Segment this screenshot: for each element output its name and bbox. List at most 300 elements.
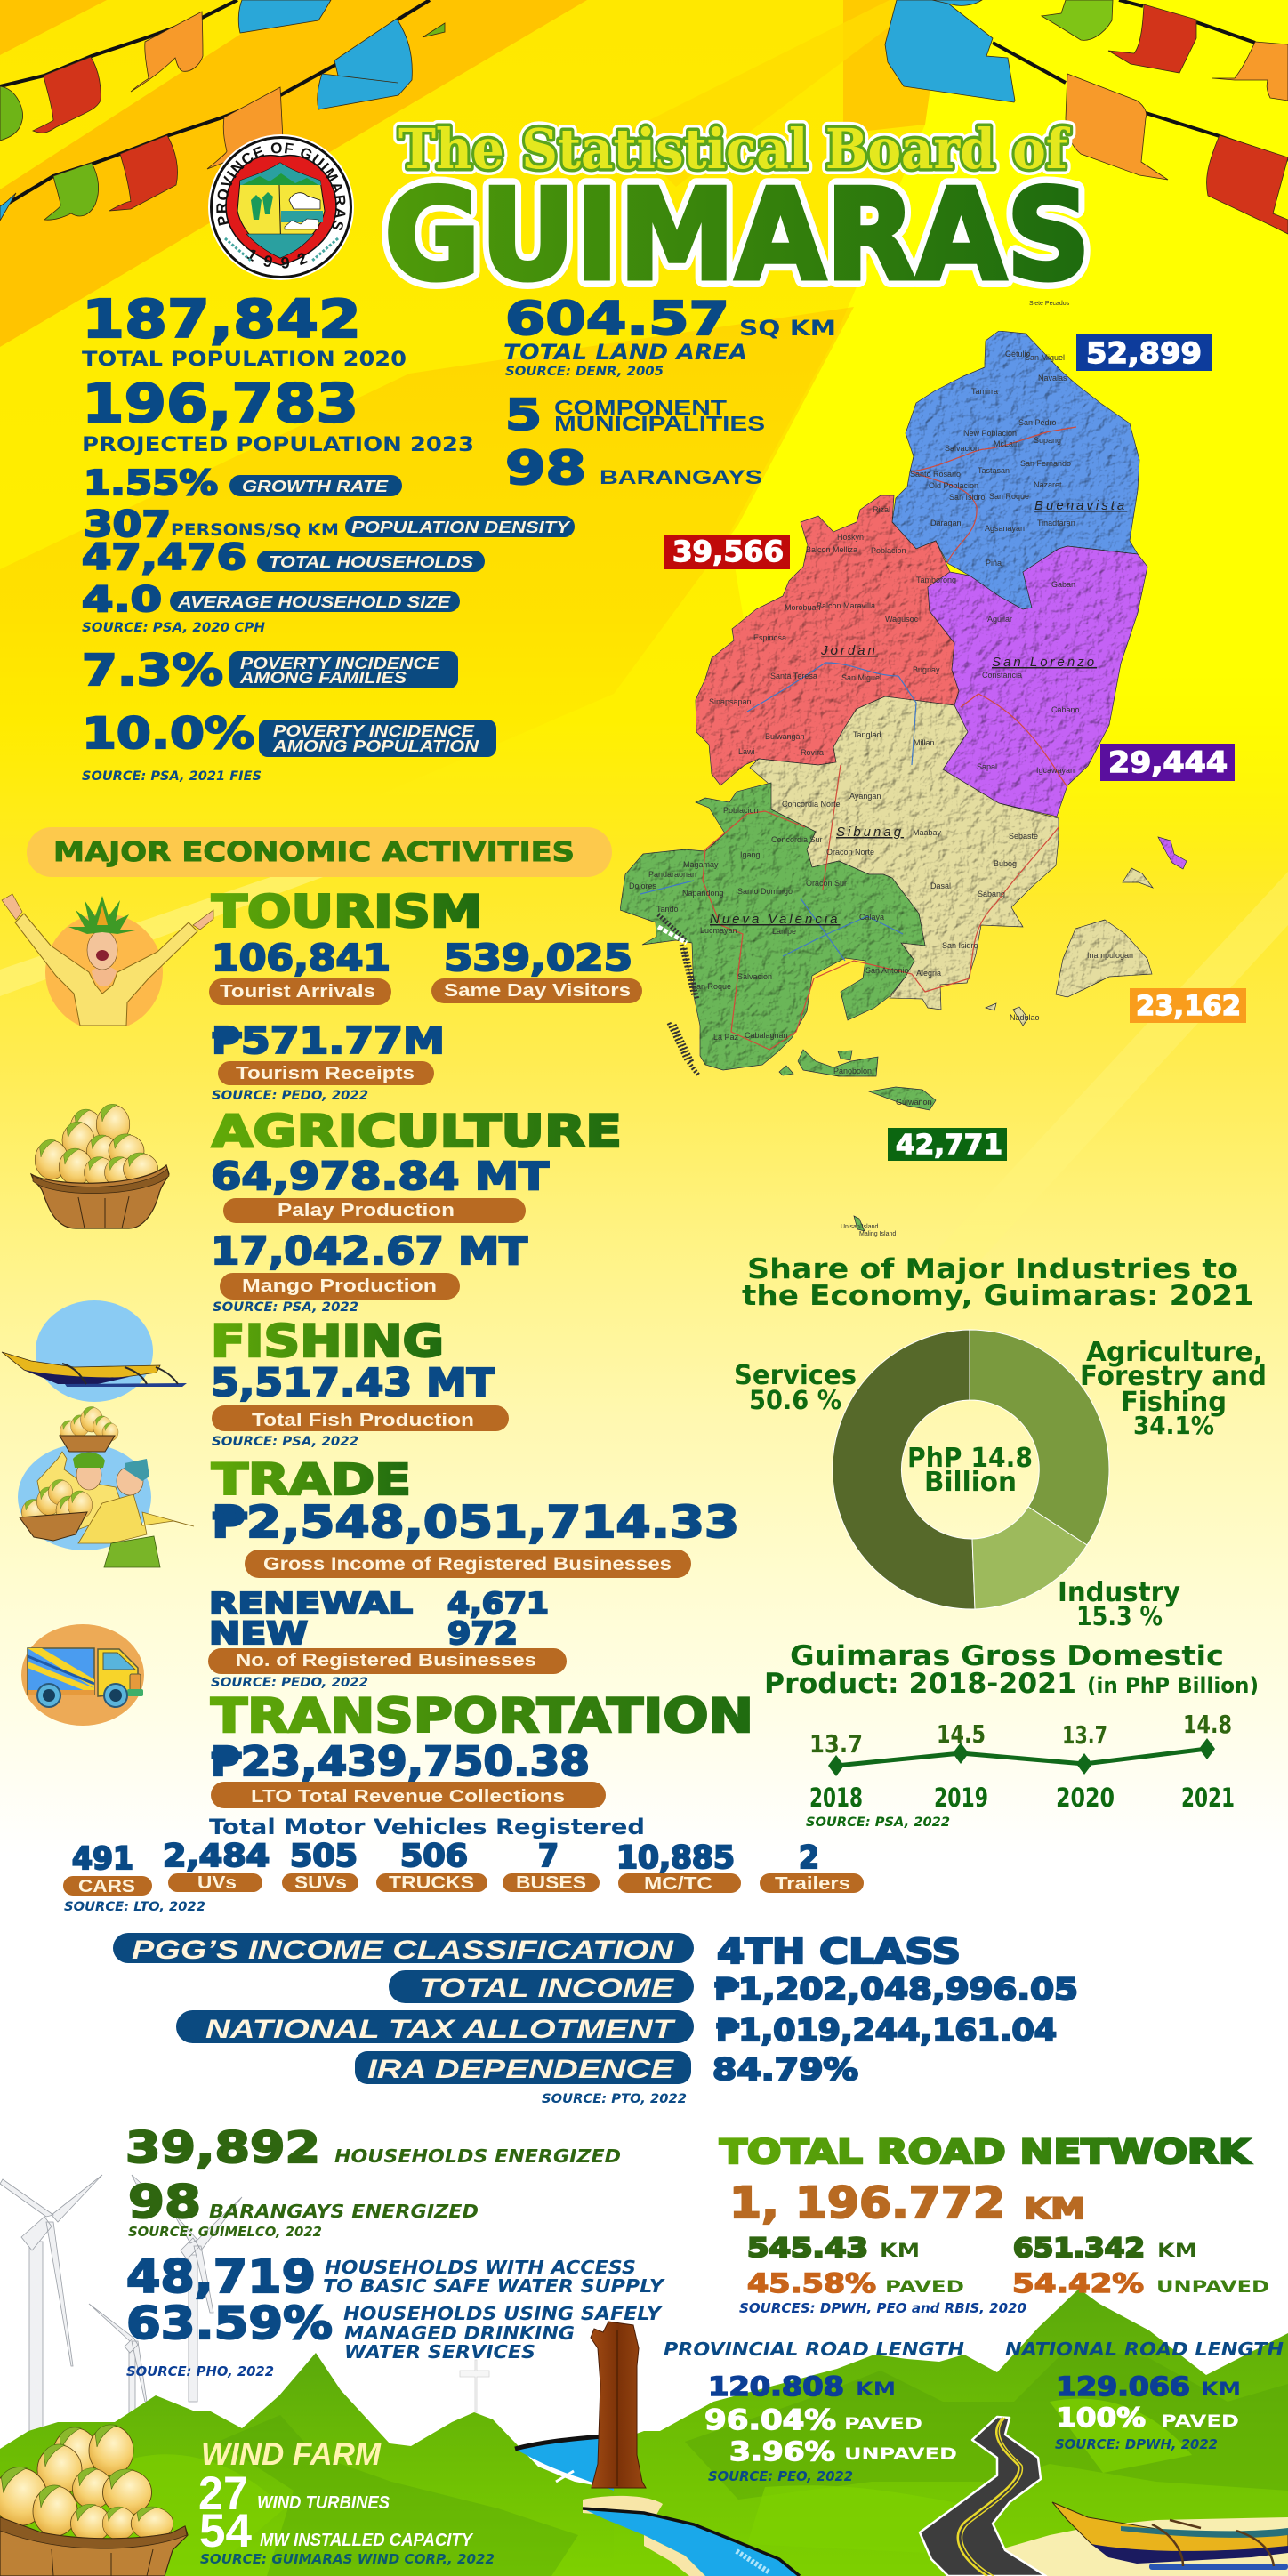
stat: unpaved road: KM — [1157, 2240, 1197, 2261]
stat: palay production — [211, 1155, 550, 1223]
stat: poverty incidence among population: 10.0% — [82, 709, 254, 759]
map barangay names: Lanipe — [772, 927, 796, 936]
donut chart: share of industries — [734, 1330, 1267, 1631]
map barangay names: Lucmayan — [700, 926, 737, 935]
bunting flags top right — [885, 0, 1288, 234]
map label: Sibunag population: 23,162 — [1136, 991, 1241, 1022]
stat: households using safely managed drinking water: WATER SERVICES — [344, 2341, 535, 2363]
stat: population density: 307 — [84, 504, 171, 545]
map barangay names: Espinosa — [753, 633, 786, 642]
stat: national paved — [1056, 2403, 1239, 2433]
map barangay names: Concordia Sur — [771, 835, 823, 844]
stat: wind turbines — [198, 2467, 390, 2520]
icon: Balaan Bukid tower — [591, 2322, 646, 2488]
line chart: gross domestic product — [764, 1640, 1259, 1830]
stat: unpaved road — [1012, 2233, 1269, 2298]
stat: provincial road km: KM — [856, 2379, 896, 2400]
stat: households with access to basic safe water — [126, 2251, 666, 2304]
stat: barangays energized: 98 — [128, 2177, 201, 2229]
map regions — [620, 331, 1187, 1231]
source: PSA 2020 CPH: SOURCE: PSA, 2020 CPH — [82, 621, 265, 635]
stat: paved road — [747, 2233, 964, 2298]
heading: trade: TRADE — [212, 1455, 411, 1505]
stat: tourism receipts: Tourism Receipts — [236, 1064, 415, 1083]
title line: The Statistical Board of: The Statistical Board of — [398, 117, 1070, 181]
chart title: GDP — [764, 1640, 1259, 1700]
stat: same day visitors: Same Day Visitors — [444, 981, 631, 1001]
vehicle count: buses: BUSES — [516, 1873, 586, 1893]
map barangay names: Sabang — [978, 890, 1005, 898]
map barangay names: Rizal — [873, 505, 890, 514]
stat: total land area: 604.57 — [505, 293, 729, 346]
map barangay names: Concordia Norte — [782, 800, 841, 809]
row: national tax allotment: NATIONAL TAX ALLOTMENT — [205, 2015, 676, 2044]
vehicle count: MC/TC: MC/TC — [644, 1874, 712, 1894]
heading: transportation: TRANSPORTATION — [211, 1689, 753, 1743]
stat: component municipalities: MUNICIPALITIES — [554, 412, 765, 435]
stat: total land area: SQ KM — [739, 316, 836, 341]
map barangay names — [629, 301, 1133, 1237]
vehicle count: trucks — [376, 1839, 487, 1893]
map barangay names: Daragan — [930, 519, 962, 527]
stat: LTO total revenue collections: LTO Total Revenue Collections — [251, 1787, 565, 1807]
stat: total fish production: Total Fish Production — [252, 1411, 474, 1430]
icon: wind turbines — [0, 2175, 489, 2437]
map barangay names: Bulwangan — [765, 732, 805, 741]
GDP years: 2018 — [809, 1783, 863, 1813]
stat: total road length: KM — [1024, 2192, 1085, 2226]
stat: national paved: 100% — [1056, 2403, 1146, 2433]
map barangay names: Bugnay — [913, 665, 940, 674]
map municipality names: San Lorenzo — [992, 655, 1097, 670]
map municipality names — [710, 498, 1127, 927]
map barangay names: Lawi — [738, 747, 755, 756]
panel: transportation — [63, 1689, 864, 1914]
source: PSA 2022: SOURCE: PSA, 2022 — [213, 1300, 358, 1315]
vehicle count: UVs — [163, 1839, 270, 1893]
stat: households using safely managed drinking water: MANAGED DRINKING — [344, 2322, 575, 2344]
stat: mango production — [211, 1229, 528, 1300]
map barangay names: Old Poblacion — [929, 481, 978, 490]
map barangay names: Ayangan — [849, 792, 881, 801]
stat: tourism receipts: ₱571.77M — [212, 1019, 445, 1062]
vehicle count: trailers: Trailers — [775, 1874, 850, 1894]
row: total income: TOTAL INCOME — [419, 1974, 674, 2003]
heading: tourism: TOURISM — [212, 886, 482, 938]
stat: total population 2020: 187,842 — [82, 288, 361, 350]
map barangay names: Unisan Island — [841, 1224, 879, 1230]
vehicle count: cars — [63, 1841, 152, 1896]
map barangay names: Inampulogan — [1087, 951, 1133, 960]
map label: Nueva Valencia population: 42,771 — [896, 1130, 1002, 1161]
map barangay names: San Antonio — [865, 966, 909, 975]
stat: gross income of registered businesses: ₱2,548,051,714.33 — [212, 1497, 739, 1548]
map barangay names: New Poblacion — [963, 429, 1017, 438]
map barangay names: Supang — [1034, 436, 1061, 445]
stat: national paved: PAVED — [1161, 2411, 1239, 2431]
row: IRA dependence — [355, 2051, 858, 2088]
map label: San Lorenzo population: 29,444 — [1108, 745, 1228, 779]
label: agriculture, forestry and fishing: 34.1% — [1133, 1411, 1214, 1440]
stat: total households: TOTAL HOUSEHOLDS — [269, 553, 473, 571]
vehicle count: trucks: 506 — [400, 1839, 468, 1874]
seal: Province of Guimaras — [208, 134, 354, 280]
heading: provincial road length: PROVINCIAL ROAD LENGTH — [664, 2339, 964, 2360]
title line: GUIMARAS: GUIMARAS — [384, 163, 1091, 309]
map islets, rivers and roads — [640, 427, 1076, 1076]
stat: installed capacity: MW INSTALLED CAPACITY — [260, 2531, 474, 2550]
stat: projected population 2023: PROJECTED POPULATION 2023 — [82, 434, 474, 456]
map barangay names: Tando — [656, 905, 679, 914]
source: PEDO 2022: SOURCE: PEDO, 2022 — [211, 1676, 368, 1690]
stat: average household size — [82, 580, 460, 620]
scenery: river and sand — [515, 2435, 1288, 2576]
map of Guimaras — [620, 301, 1246, 1237]
map barangay names: Cabalagnan — [745, 1031, 788, 1040]
stat: provincial paved: 96.04% — [704, 2404, 836, 2436]
stat: installed capacity — [199, 2505, 474, 2557]
icon: winding road — [920, 2417, 1046, 2576]
stat: unpaved road: 651.342 — [1013, 2233, 1145, 2263]
map barangay names: Bubog — [994, 859, 1017, 868]
vehicle count: trailers: 2 — [799, 1840, 819, 1876]
source: PSA 2022: SOURCE: PSA, 2022 — [212, 1435, 358, 1449]
stat: unpaved road: UNPAVED — [1156, 2277, 1269, 2297]
scenery: green hills — [0, 2289, 1288, 2576]
map barangay names: Salvacion — [945, 444, 979, 453]
row: national tax allotment — [176, 2010, 1057, 2049]
stat: gross income of registered businesses: Gross Income of Registered Businesses — [263, 1554, 672, 1574]
label: industry: Industry — [1058, 1577, 1180, 1608]
map barangay names: Salvacion — [737, 972, 772, 981]
map barangay names: Wagusoc — [885, 615, 919, 624]
panel: provincial road length — [664, 2339, 964, 2484]
stat: total road length: 1, 196.772 — [729, 2178, 1005, 2228]
stat: LTO total revenue collections: ₱23,439,750.38 — [211, 1738, 590, 1785]
map barangay names: Tamirra — [971, 387, 998, 396]
stat: paved road: PAVED — [885, 2277, 964, 2297]
map municipality names: Nueva Valencia — [710, 912, 841, 927]
donut centre total: PhP 14.8 — [907, 1443, 1033, 1474]
stat: tourist arrivals: 106,841 — [212, 937, 390, 979]
stat: registered businesses renewal and new — [208, 1586, 567, 1674]
source: LTO 2022: SOURCE: LTO, 2022 — [64, 1900, 205, 1914]
map barangay names: Igcawayan — [1036, 766, 1075, 775]
vehicle count: cars: CARS — [78, 1877, 135, 1896]
stat: total land area — [503, 293, 836, 379]
stat: component municipalities: COMPONENT — [554, 396, 727, 419]
GDP values — [809, 1710, 1232, 1759]
stat: provincial paved — [704, 2404, 922, 2436]
panel: major economic activities header — [27, 827, 612, 877]
vehicle count: buses — [503, 1839, 600, 1893]
bunting flags top left — [0, 0, 445, 221]
title line: GUIMARAS: GUIMARAS — [384, 163, 1091, 309]
stat: tourist arrivals: Tourist Arrivals — [220, 982, 375, 1002]
source: PTO 2022: SOURCE: PTO, 2022 — [542, 2092, 687, 2106]
map barangay names: Agsanayan — [985, 524, 1025, 533]
map barangay names: San Pedro — [1018, 418, 1057, 427]
row: national tax allotment: ₱1,019,244,161.04 — [716, 2013, 1057, 2049]
label: agriculture, forestry and fishing: Fishing — [1121, 1387, 1227, 1418]
vehicle count: UVs: 2,484 — [163, 1839, 270, 1874]
map barangay names: Oracon Norte — [826, 848, 874, 857]
icon: outrigger boat on beach — [1052, 2502, 1288, 2570]
stat: gross income of registered businesses — [212, 1497, 739, 1578]
stat: unpaved road: 54.42% — [1012, 2268, 1144, 2298]
panel: population statistics — [82, 288, 575, 784]
row: total income: ₱1,202,048,996.05 — [714, 1972, 1078, 2008]
stat: growth rate: 1.55% — [84, 463, 218, 503]
GDP line and markers — [828, 1738, 1215, 1776]
seal: Province of Guimaras: PROVINCE OF GUIMARAS — [216, 142, 345, 230]
stat: barangays — [505, 442, 762, 495]
stat: provincial road km — [708, 2371, 896, 2402]
stat: provincial unpaved — [729, 2436, 957, 2467]
map label: Buenavista population: 52,899 — [1086, 336, 1202, 370]
map barangay names: Magamay — [683, 860, 719, 869]
stat: total fish production: 5,517.43 MT — [211, 1361, 495, 1405]
stat: households energized: 39,892 — [125, 2123, 320, 2173]
donut centre total — [907, 1443, 1033, 1498]
map barangay names: Igang — [740, 850, 761, 859]
panel: fishing — [211, 1316, 509, 1449]
GDP values: 14.8 — [1183, 1710, 1232, 1739]
map barangay names: Siete Pecados — [1029, 301, 1070, 307]
panel: provincial government income — [113, 1932, 1078, 2106]
GDP values: 14.5 — [937, 1719, 986, 1749]
stat: palay production: 64,978.84 MT — [211, 1155, 550, 1199]
map barangay names: Aguilar — [987, 615, 1012, 624]
stat: growth rate — [84, 463, 402, 503]
stat: households using safely managed drinking water — [126, 2298, 664, 2363]
source: PEDO 2022: SOURCE: PEDO, 2022 — [212, 1089, 368, 1103]
stat: provincial road km: 120.808 — [708, 2371, 844, 2402]
stat: households using safely managed drinking water: HOUSEHOLDS USING SAFELY — [343, 2303, 664, 2324]
panel: utilities statistics — [125, 2123, 666, 2379]
row: total income — [389, 1970, 1078, 2008]
heading: total road network: TOTAL ROAD NETWORK — [720, 2133, 1252, 2171]
stat: paved road: 545.43 — [747, 2233, 868, 2263]
stat: provincial paved: PAVED — [844, 2414, 922, 2434]
stat: households energized — [125, 2123, 621, 2173]
map barangay names: San Fernando — [1020, 459, 1071, 468]
slice: services — [833, 1330, 975, 1609]
stat: population density: PERSONS/SQ KM — [171, 520, 339, 540]
source: GUIMELCO 2022: SOURCE: GUIMELCO, 2022 — [128, 2224, 322, 2240]
map barangay names: San Miguel — [841, 673, 881, 682]
stat: registered businesses renewal and new: 972 — [447, 1616, 518, 1652]
stat: national road km — [1056, 2371, 1241, 2402]
vehicle count: trucks: TRUCKS — [389, 1873, 474, 1893]
heading: fishing: FISHING — [211, 1316, 444, 1367]
stat: same day visitors — [431, 937, 642, 1003]
map barangay names: Sinapsapan — [709, 697, 752, 706]
stat: same day visitors: 539,025 — [444, 937, 632, 979]
map barangay names: Nazaret — [1034, 480, 1062, 489]
map municipality names: Sibunag — [836, 825, 904, 840]
stat: tourism receipts — [212, 1019, 445, 1085]
subheading: total motor vehicles registered: Total Motor Vehicles Registered — [209, 1815, 645, 1839]
stat: mango production: Mango Production — [242, 1276, 437, 1296]
vehicle count: buses: 7 — [538, 1839, 559, 1874]
map barangay names: Guiwanon — [896, 1098, 932, 1107]
source: PSA 2021 FIES: SOURCE: PSA, 2021 FIES — [82, 769, 262, 784]
map barangay names: Alegria — [916, 969, 941, 978]
stat: growth rate: GROWTH RATE — [242, 478, 389, 495]
icon: fishing boat — [2, 1300, 187, 1402]
stat: average household size: 4.0 — [82, 580, 162, 620]
map barangay names: Dasal — [930, 881, 951, 890]
label: agriculture, forestry and fishing: Agriculture, — [1086, 1337, 1263, 1368]
source: DPWH, PEO and RBIS 2020: SOURCES: DPWH, PEO and RBIS, 2020 — [739, 2300, 1026, 2316]
stat: registered businesses renewal and new: 4,671 — [447, 1586, 549, 1621]
stat: barangays energized: BARANGAYS ENERGIZED — [209, 2201, 479, 2222]
stat: total land area: SOURCE: DENR, 2005 — [505, 365, 664, 379]
stat: projected population 2023 — [82, 373, 474, 456]
source: DPWH 2022: SOURCE: DPWH, 2022 — [1055, 2436, 1218, 2452]
map barangay names: Calaya — [859, 913, 884, 922]
panel: major economic activities header: MAJOR ECONOMIC ACTIVITIES — [53, 837, 575, 868]
label: services: 50.6 % — [749, 1385, 841, 1415]
vehicle count: MC/TC: 10,885 — [616, 1840, 735, 1876]
map barangay names: Tanglad — [853, 730, 881, 739]
map barangay names: Maling Island — [859, 1231, 896, 1237]
stat: total households — [82, 537, 485, 578]
chart title: share of major industries: Share of Major Industries to — [747, 1253, 1238, 1285]
GDP values: 13.7 — [1062, 1720, 1107, 1750]
stat: population density — [84, 504, 575, 545]
panel: tourism — [209, 886, 642, 1103]
row: income classification — [113, 1932, 961, 1971]
label: agriculture, forestry and fishing — [1080, 1337, 1267, 1440]
stat: poverty incidence among families: 7.3% — [82, 646, 223, 696]
map barangay names: Santo Rosario — [910, 470, 961, 479]
map municipality names: Buenavista — [1034, 498, 1127, 513]
stat: poverty incidence among population: AMONG POPULATION — [272, 737, 479, 755]
stat: barangays energized — [128, 2177, 479, 2229]
slice: industry — [972, 1507, 1087, 1609]
row: IRA dependence: 84.79% — [712, 2052, 858, 2088]
map barangay names: Constancia — [982, 671, 1022, 680]
stat: component municipalities — [505, 390, 765, 440]
icon: mango vendors — [18, 1406, 194, 1567]
icon: tourism dancer — [2, 894, 213, 1031]
map barangay names: Sebaste — [1009, 832, 1038, 841]
map barangay names: Cabano — [1051, 705, 1080, 714]
label: services: Services — [734, 1360, 857, 1391]
stat: palay production: Palay Production — [278, 1201, 455, 1220]
stat: registered businesses renewal and new: No. of Registered Businesses — [236, 1651, 536, 1670]
map municipality names: Jordan — [820, 643, 878, 658]
label: agriculture, forestry and fishing: Forestry and — [1080, 1361, 1267, 1392]
map barangay names: Panobolon — [833, 1067, 872, 1075]
map barangay names: San Isidro — [942, 941, 978, 950]
stat: population density: POPULATION DENSITY — [351, 519, 571, 536]
row: income classification: 4TH CLASS — [717, 1932, 961, 1971]
GDP years: 2020 — [1056, 1783, 1115, 1813]
GDP years: 2021 — [1181, 1783, 1235, 1813]
stat: total fish production — [211, 1361, 509, 1431]
stat: barangays: 98 — [505, 442, 586, 495]
map barangay names: San Roque — [691, 982, 731, 991]
panel: national road length — [1005, 2339, 1284, 2452]
stat: total land area: TOTAL LAND AREA — [503, 340, 747, 365]
row: IRA dependence: IRA DEPENDENCE — [367, 2055, 674, 2084]
stat: total households: 47,476 — [82, 537, 246, 578]
stat: poverty incidence among families — [82, 646, 458, 696]
GDP years: 2019 — [934, 1783, 988, 1813]
row: income classification: PGG’S INCOME CLASSIFICATION — [132, 1936, 675, 1965]
stat: wind turbines: 27 — [198, 2467, 248, 2520]
map barangay names: Tastasan — [978, 466, 1010, 475]
heading: national road length: NATIONAL ROAD LENGTH — [1005, 2339, 1284, 2360]
vehicle count: trailers — [760, 1840, 864, 1894]
map barangay names: Dolores — [629, 881, 657, 890]
stat: paved road: KM — [880, 2240, 920, 2261]
stat: tourist arrivals — [209, 937, 391, 1005]
map barangay names: San Roque — [989, 492, 1029, 501]
map barangay names: Sapal — [977, 762, 997, 771]
stat: provincial unpaved: 3.96% — [729, 2436, 835, 2467]
map barangay names: Gaban — [1051, 580, 1075, 589]
stat: households using safely managed drinking water: 63.59% — [126, 2298, 333, 2349]
stat: projected population 2023: 196,783 — [82, 373, 358, 435]
heading: agriculture: AGRICULTURE — [212, 1106, 622, 1157]
panel: land area statistics — [503, 293, 836, 495]
stat: total population 2020 — [82, 288, 407, 371]
map barangay names: Balcon Melliza — [806, 545, 857, 554]
heading: wind farm: WIND FARM — [201, 2437, 382, 2472]
source: PEO 2022: SOURCE: PEO, 2022 — [708, 2468, 853, 2484]
map barangay names: Nadulao — [1010, 1013, 1040, 1022]
panel: agriculture — [211, 1106, 622, 1315]
stat: poverty incidence among families: POVERTY INCIDENCE — [240, 655, 440, 672]
map barangay names: Tamborong — [916, 576, 956, 584]
stat: barangays: BARANGAYS — [600, 466, 762, 488]
map barangay names: Maabay — [913, 828, 942, 837]
map barangay names: McLain — [994, 439, 1019, 448]
map barangay names: Pandaraonan — [648, 870, 696, 879]
chart title: GDP: (in PhP Billion) — [1087, 1673, 1259, 1698]
map barangay names: Poblacion — [871, 546, 906, 555]
icon: mango basket — [31, 1104, 169, 1228]
stat: households with access to basic safe water: HOUSEHOLDS WITH ACCESS — [325, 2257, 636, 2278]
chart title: share of major industries — [742, 1253, 1254, 1312]
label: industry: 15.3 % — [1076, 1601, 1163, 1631]
stat: poverty incidence among families: AMONG FAMILIES — [239, 669, 407, 687]
source: Guimaras Wind Corp 2022: SOURCE: GUIMARAS WIND CORP., 2022 — [200, 2551, 495, 2567]
map barangay names: Napandong — [682, 889, 724, 898]
vehicle count: MC/TC — [616, 1840, 741, 1894]
slice: agriculture, forestry and fishing — [970, 1330, 1109, 1545]
stat: paved road: 45.58% — [747, 2268, 876, 2298]
stat: mango production: 17,042.67 MT — [211, 1229, 528, 1274]
map barangay names: Oracon Sur — [806, 879, 847, 888]
stat: registered businesses renewal and new: RENEWAL — [209, 1586, 413, 1621]
vehicle count: SUVs: 505 — [290, 1839, 358, 1874]
GDP values: 13.7 — [809, 1729, 863, 1759]
title — [384, 117, 1091, 309]
seal: Province of Guimaras: 1992 — [247, 249, 308, 269]
icon: truck — [21, 1624, 144, 1726]
map barangay names: Millan — [914, 738, 935, 747]
map barangay names: Piña — [986, 559, 1002, 568]
chart title: GDP: Guimaras Gross Domestic — [790, 1640, 1224, 1672]
vehicle count: SUVs: SUVs — [294, 1873, 347, 1893]
stat: households energized: HOUSEHOLDS ENERGIZED — [334, 2145, 621, 2167]
stat: component municipalities: 5 — [505, 390, 542, 440]
